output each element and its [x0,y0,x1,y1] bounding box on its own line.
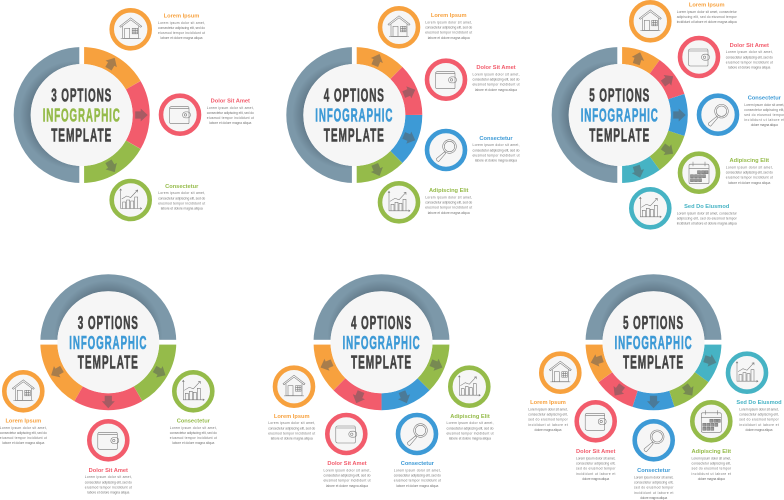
text block: Adipiscing Elit: Lorem ipsum dolor sit amet, [692,456,731,460]
panel: 4 options bottom [268,258,494,488]
text block: Consectetur [394,461,441,488]
text block: Lorem Ipsum: consectetur adipiscing elit, sed do [425,26,472,30]
text block: Consectetur: labore et dolore magna aliqua [475,158,517,162]
text block: Lorem Ipsum: incididunt ut labore et [528,423,568,427]
title: TEMPLATE [324,125,385,145]
text block: Lorem Ipsum: consectetur adipiscing elit, sed do [0,431,47,435]
text block: Consectetur [744,96,784,127]
text block: Dolor Sit Amet: eiusmod tempor incididunt ut [85,485,132,489]
text block: Lorem Ipsum: labore et dolore magna aliqua [2,441,44,445]
text block: Lorem Ipsum: consectetur adipiscing elit, sed do [268,426,315,430]
text block: Consectetur: Lorem ipsum dolor sit amet, [744,103,784,107]
text block: Consectetur: labore et dolore magna aliqua [172,441,214,445]
text block: Dolor Sit Amet: Lorem ipsum dolor sit amet, [85,475,132,479]
panel: 5 options bottom [528,259,782,500]
text block: Sed Do Eiusmod: Sed Do Eiusmod [684,204,730,210]
text block: Adipiscing Elit: Adipiscing Elit [692,449,731,455]
text block: Lorem Ipsum: eiusmod tempor incididunt ut [158,31,205,35]
text block: Lorem Ipsum: labore et dolore magna aliqua [428,36,470,40]
text block: Adipiscing Elit: consectetur adipiscing elit, sed do [446,426,494,430]
text block: Dolor Sit Amet: Lorem ipsum dolor sit amet, [726,50,773,54]
icon: chart [631,189,669,227]
text block: Consectetur: Lorem ipsum dolor sit amet, [394,468,441,472]
text block: Adipiscing Elit: labore et dolore magna aliqua [728,181,770,185]
text block: Dolor Sit Amet: Dolor Sit Amet [89,468,128,474]
text block: Consectetur: incididunt ut labore et [634,491,674,495]
text block: Sed Do Eiusmod: Lorem ipsum dolor sit amet, consectetur [677,211,738,215]
text block: Sed Do Eiusmod: dolore magna aliqua [746,428,773,432]
title: TEMPLATE [78,353,139,373]
icon: magnifier [635,421,673,459]
title: 4 OPTIONS [324,86,385,106]
text block: Adipiscing Elit: Lorem ipsum dolor sit amet, [425,196,472,200]
text block: Dolor Sit Amet: eiusmod tempor incididunt ut [472,83,520,87]
text block: Adipiscing Elit: Adipiscing Elit [450,414,490,420]
text block: Adipiscing Elit: sed do eiusmod tempor [692,467,732,471]
title: 3 OPTIONS [51,86,112,106]
text block: Dolor Sit Amet: consectetur adipiscing elit, [576,462,616,466]
text block: Consectetur: Consectetur [165,184,199,190]
text block: Consectetur: dolore magna aliqua [751,123,778,127]
text block: Dolor Sit Amet: Dolor Sit Amet [476,65,516,71]
icon: house [541,354,579,392]
text block: Dolor Sit Amet: labore et dolore magna aliqua [209,121,251,125]
text block: Lorem Ipsum: eiusmod tempor incididunt ut [425,31,472,35]
text block: Lorem Ipsum: labore et dolore magna aliqua [160,36,203,40]
text block: Lorem Ipsum: eiusmod tempor incididunt ut [0,436,47,440]
text block: Consectetur [472,136,520,162]
icon: chart [380,183,418,221]
text block: Consectetur: consectetur adipiscing elit, sed do [170,431,217,435]
icon: wallet [327,415,365,453]
text block: Lorem Ipsum: eiusmod tempor incididunt ut [268,431,315,435]
text block: Dolor Sit Amet: labore et dolore magna aliqua [475,88,517,92]
text block: Consectetur: dolore magna aliqua [640,496,667,500]
text block: Sed Do Eiusmod: incididunt ut labore et [739,423,779,427]
title: 4 OPTIONS [351,313,412,333]
text block: Lorem Ipsum: Lorem Ipsum [274,414,310,420]
text block: Adipiscing Elit [726,158,773,185]
text block: Consectetur: eiusmod tempor incididunt ut [472,153,520,157]
text block: Consectetur: Lorem ipsum dolor sit amet, [170,426,217,430]
text block: Dolor Sit Amet: Lorem ipsum dolor sit amet, [576,456,616,460]
text block: Lorem Ipsum: adipiscing elit, sed do eiusmod tempor [677,15,738,19]
text block: Adipiscing Elit: dolore magna aliqua [698,477,725,481]
title: TEMPLATE [351,353,412,373]
text block: Dolor Sit Amet [576,449,616,481]
title: INFOGRAPHIC [315,106,393,126]
text block: Lorem Ipsum: dolore magna aliqua [534,428,562,432]
title [614,313,692,372]
text block: Adipiscing Elit [692,449,732,481]
text block: Dolor Sit Amet: Lorem ipsum dolor sit amet, [207,106,254,110]
text block: Consectetur [634,468,674,500]
text block: Lorem Ipsum [268,414,315,440]
text block: Sed Do Eiusmod: Lorem ipsum dolor sit amet, [739,408,779,412]
text block: Dolor Sit Amet: sed do eiusmod tempor [576,467,616,471]
text block: Consectetur: consectetur adipiscing elit, sed do [472,148,520,152]
icon: chart [174,372,212,410]
title [315,86,393,145]
icon: calendar [692,402,730,440]
text block: Lorem Ipsum [158,14,205,40]
title: TEMPLATE [51,125,112,145]
text block: Lorem Ipsum: incididunt ut labore et dolore magna aliqua [677,20,737,24]
icon: house [275,368,313,406]
panel: 3 options right [0,10,254,219]
icon: magnifier [398,415,436,453]
text block: Adipiscing Elit: labore et dolore magna aliqua [449,437,491,441]
text block: Dolor Sit Amet: labore et dolore magna aliqua [326,484,368,488]
text block: Adipiscing Elit: eiusmod tempor incididunt ut [425,206,472,210]
title: INFOGRAPHIC [342,333,420,353]
text block: Consectetur: sed do eiusmod tempor [744,113,784,117]
text block: Sed Do Eiusmod: sed do eiusmod tempor [739,418,780,422]
text block: Consectetur: Consectetur [479,136,513,142]
text block: Dolor Sit Amet [472,65,520,92]
icon: magnifier [699,96,737,134]
title: TEMPLATE [589,125,650,145]
text block: Consectetur [170,418,217,445]
text block: Adipiscing Elit: consectetur adipiscing elit, [692,462,731,466]
text block: Consectetur: incididunt ut labore et [744,118,784,122]
title: INFOGRAPHIC [43,106,121,126]
text block: Dolor Sit Amet: consectetur adipiscing elit, sed do [324,474,371,478]
text block: Lorem Ipsum [677,3,738,24]
icon: wallet [680,38,718,76]
text block: Sed Do Eiusmod [736,400,782,432]
text block: Sed Do Eiusmod: consectetur adipiscing elit, [739,413,779,417]
text block: Consectetur: eiusmod tempor incididunt ut [158,201,205,205]
text block: Lorem Ipsum: Lorem Ipsum [689,3,725,9]
text block: Consectetur: Consectetur [748,96,782,102]
title [43,86,121,145]
text block: Dolor Sit Amet [726,43,773,70]
text block: Consectetur: Lorem ipsum dolor sit amet, [158,191,205,195]
text block: Lorem Ipsum: Lorem ipsum dolor sit amet, [268,421,315,425]
title [581,86,659,145]
text block: Sed Do Eiusmod: adipiscing elit, sed do eiusmod tempor [677,216,738,220]
text block: Adipiscing Elit [425,188,472,215]
text block: Lorem Ipsum: consectetur adipiscing elit, sed do [158,26,205,30]
icon: wallet [577,402,615,440]
text block: Consectetur: sed do eiusmod tempor [634,486,674,490]
text block: Lorem Ipsum [0,418,47,445]
text block: Dolor Sit Amet: Dolor Sit Amet [327,461,367,467]
text block: Dolor Sit Amet: consectetur adipiscing elit, sed do [726,55,773,59]
text block: Lorem Ipsum: Lorem ipsum dolor sit amet, [158,21,205,25]
title: TEMPLATE [623,353,684,373]
text block: Consectetur: consectetur adipiscing elit, [634,481,674,485]
title: 5 OPTIONS [589,86,650,106]
text block: Lorem Ipsum: Lorem Ipsum [164,14,199,20]
text block: Consectetur [158,184,205,210]
text block: Lorem Ipsum: Lorem Ipsum [530,400,566,406]
text block: Lorem Ipsum: Lorem ipsum dolor sit amet, [528,408,568,412]
text block: Adipiscing Elit: Lorem ipsum dolor sit amet, [446,421,494,425]
text block: Lorem Ipsum: labore et dolore magna aliqua [271,437,313,441]
text block: Dolor Sit Amet: Lorem ipsum dolor sit amet, [472,72,520,76]
text block: Dolor Sit Amet: eiusmod tempor incididunt ut [324,479,371,483]
text block: Adipiscing Elit: eiusmod tempor incididunt ut [446,431,494,435]
text block: Dolor Sit Amet: consectetur adipiscing elit, sed do [472,78,520,82]
text block: Adipiscing Elit [446,414,494,440]
text block: Dolor Sit Amet: labore et dolore magna aliqua [728,66,770,70]
text block: Sed Do Eiusmod [677,204,738,226]
title: INFOGRAPHIC [581,106,659,126]
icon: chart [450,368,488,406]
text block: Dolor Sit Amet: Lorem ipsum dolor sit amet, [324,468,371,472]
text block: Consectetur: consectetur adipiscing elit, sed do [158,196,205,200]
icon: wallet [89,421,127,459]
text block: Consectetur: Consectetur [637,468,671,474]
text block: Lorem Ipsum: Lorem ipsum dolor sit amet, consectetur [677,10,738,14]
icon: chart [112,181,150,219]
icon: house [631,2,669,40]
text block: Sed Do Eiusmod: incididunt ut labore et dolore magna aliqua [677,221,737,225]
text block: Lorem Ipsum: sed do eiusmod tempor [528,418,569,422]
text block: Consectetur: Lorem ipsum dolor sit amet, [472,143,520,147]
text block: Sed Do Eiusmod: Sed Do Eiusmod [736,400,782,406]
text block: Dolor Sit Amet [207,98,254,125]
text block: Consectetur: consectetur adipiscing elit, sed do [394,474,441,478]
text block: Consectetur: consectetur adipiscing elit, [744,108,784,112]
panel: 4 options right [270,8,520,221]
text block: Dolor Sit Amet [85,468,132,494]
title [342,313,420,372]
icon: house [112,10,150,48]
text block: Consectetur: Consectetur [401,461,435,467]
text block: Adipiscing Elit: labore et dolore magna aliqua [428,211,470,215]
title: 5 OPTIONS [623,313,684,333]
text block: Consectetur: eiusmod tempor incididunt ut [394,479,441,483]
text block: Lorem Ipsum [528,400,569,432]
text block: Dolor Sit Amet: incididunt ut labore et [576,472,616,476]
icon: wallet [161,96,199,134]
donut chart [570,259,737,425]
icon: house [380,8,418,46]
text block: Consectetur: Lorem ipsum dolor sit amet, [634,476,674,480]
donut chart [537,32,703,198]
text block: Dolor Sit Amet: dolore magna aliqua [582,477,609,481]
text block: Dolor Sit Amet: eiusmod tempor incididunt ut [207,116,254,120]
text block: Dolor Sit Amet: labore et dolore magna aliqua [87,491,129,495]
panel: 3 options bottom [0,261,217,495]
text block: Dolor Sit Amet: Dolor Sit Amet [211,99,250,105]
text block: Lorem Ipsum: Lorem Ipsum [5,418,41,424]
title [69,313,147,372]
text block: Adipiscing Elit: incididunt ut labore et [692,472,731,476]
icon: house [4,372,42,410]
text block: Adipiscing Elit: Adipiscing Elit [429,188,469,194]
text block: Dolor Sit Amet [324,461,371,488]
icon: calendar [680,154,718,192]
text block: Consectetur: labore et dolore magna aliqua [161,206,203,210]
icon: chart [728,354,766,392]
text block: Adipiscing Elit: Adipiscing Elit [730,158,769,164]
donut chart [0,34,163,196]
title: 3 OPTIONS [78,313,139,333]
text block: Lorem Ipsum: Lorem Ipsum [431,13,467,19]
text block: Dolor Sit Amet: consectetur adipiscing elit, sed do [85,480,132,484]
donut chart [270,31,438,199]
text block: Dolor Sit Amet: Dolor Sit Amet [730,43,769,49]
icon: wallet [427,61,465,99]
text block: Lorem Ipsum [425,13,472,40]
text block: Lorem Ipsum: Lorem ipsum dolor sit amet, [425,20,472,24]
text block: Adipiscing Elit: consectetur adipiscing elit, sed do [726,171,773,175]
text block: Adipiscing Elit: consectetur adipiscing elit, sed do [425,201,472,205]
text block: Adipiscing Elit: eiusmod tempor incididunt ut [726,176,773,180]
panel: 5 options right [537,2,784,227]
icon: magnifier [427,131,465,169]
text block: Consectetur: Consectetur [177,418,211,424]
text block: Dolor Sit Amet: Dolor Sit Amet [576,449,615,455]
text block: Dolor Sit Amet: eiusmod tempor incididunt ut [726,60,773,64]
donut chart [297,258,466,426]
text block: Dolor Sit Amet: consectetur adipiscing elit, sed do [207,111,254,115]
donut chart [27,261,190,423]
text block: Adipiscing Elit: Lorem ipsum dolor sit amet, [726,166,773,170]
title: INFOGRAPHIC [614,333,692,353]
text block: Consectetur: labore et dolore magna aliqua [396,484,438,488]
text block: Lorem Ipsum: Lorem ipsum dolor sit amet, [0,426,47,430]
text block: Consectetur: eiusmod tempor incididunt ut [170,436,217,440]
text block: Lorem Ipsum: consectetur adipiscing elit, [528,413,568,417]
title: INFOGRAPHIC [69,333,147,353]
